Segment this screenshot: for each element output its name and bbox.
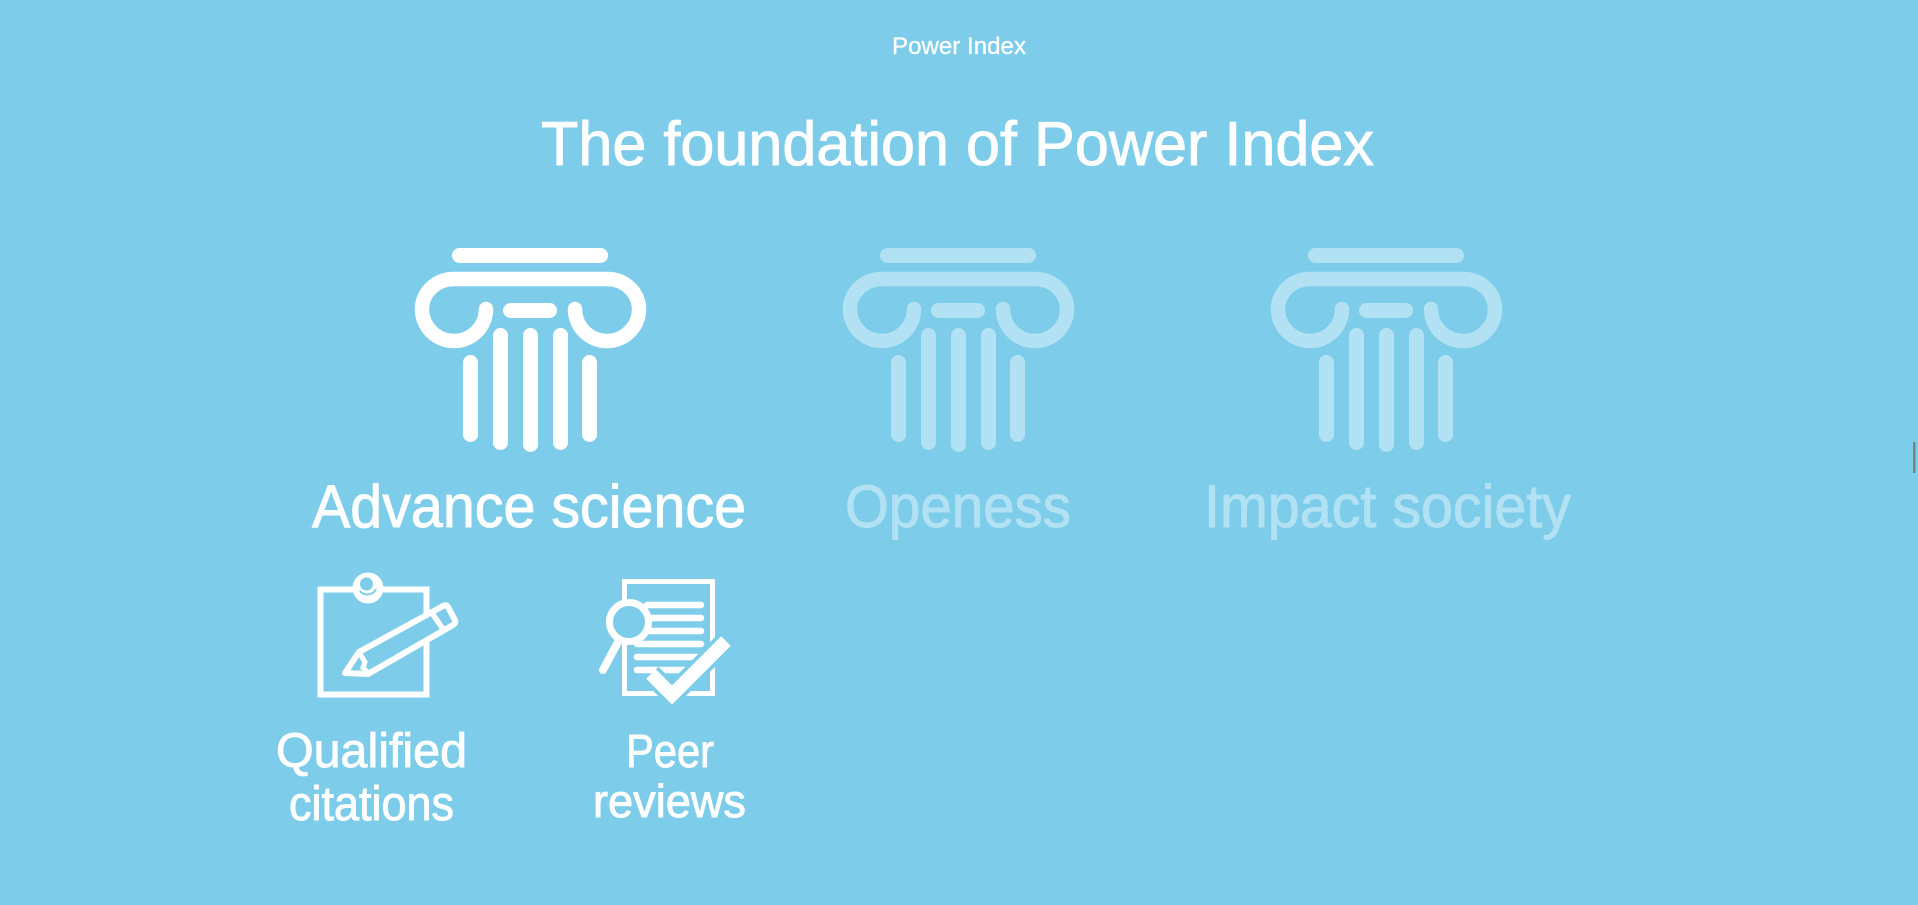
panel: impact society pillar (faded) (1204, 248, 1571, 540)
scrollbar marker (1913, 442, 1916, 473)
label: Peer reviews (593, 725, 746, 827)
panel: openess pillar (faded) (845, 248, 1071, 540)
panel: qualified citations (276, 572, 467, 831)
label: Peer reviews: reviews (593, 775, 746, 827)
icon: pillar (faded) (850, 248, 1067, 452)
label: Qualified citations: citations (289, 778, 454, 831)
label: Impact society: Impact society (1204, 473, 1571, 540)
icon: pillar (faded) (1278, 248, 1495, 452)
label: Openess: Openess (845, 473, 1071, 540)
panel: peer reviews (593, 582, 746, 827)
panel: advance science pillar (312, 248, 746, 540)
label: Qualified citations (276, 725, 467, 831)
label: Qualified citations: Qualified (276, 725, 467, 778)
icon: document with magnifier and check (603, 582, 726, 695)
icon: note with pencil (320, 572, 455, 694)
title: The foundation of Power Index (541, 110, 1374, 179)
label: Advance science: Advance science (312, 473, 746, 540)
label: Peer reviews: Peer (626, 725, 714, 777)
eyebrow: Power Index: Power Index (892, 33, 1026, 60)
icon: pillar (active) (422, 248, 639, 452)
